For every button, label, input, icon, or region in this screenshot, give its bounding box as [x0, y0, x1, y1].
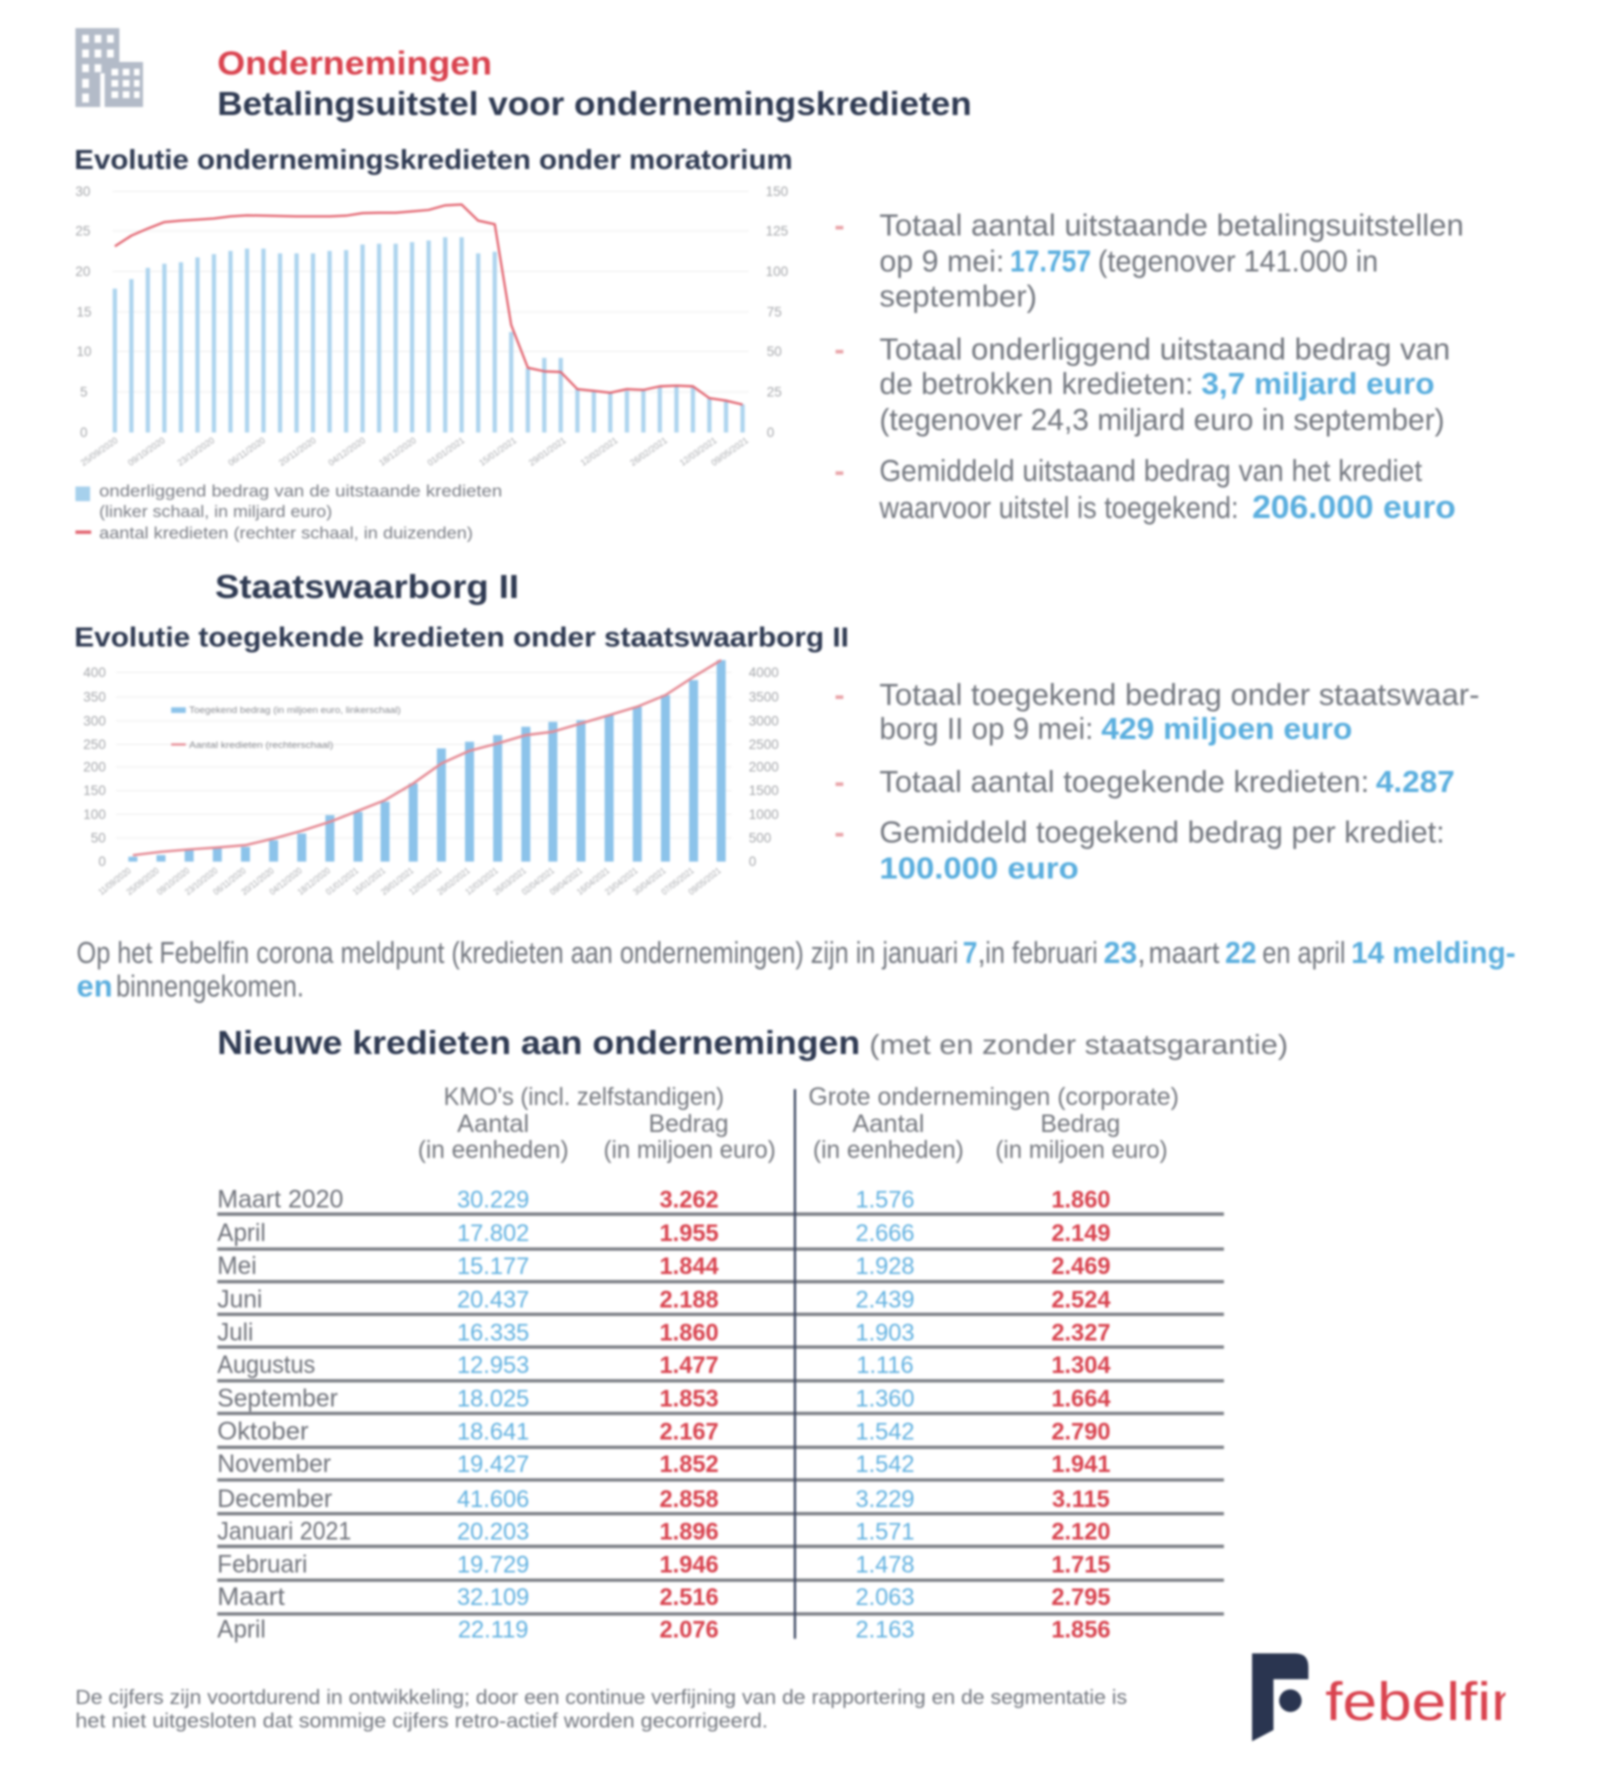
right axis labels: 0 [749, 854, 756, 869]
row: Mei: Mei [217, 1253, 257, 1280]
x axis date labels: 12/02/2021 [407, 866, 444, 897]
text block: Febelfin corona meldpunt: , [1137, 936, 1146, 970]
text block: Febelfin corona meldpunt: 14 melding- [1351, 936, 1516, 970]
row: September: 1.853 [660, 1387, 719, 1413]
row: Augustus [217, 1352, 1111, 1379]
bullet 1: Totaal toegekend bedrag onder staatswaar- [879, 678, 1480, 712]
row: Juli: 2.327 [1051, 1320, 1110, 1346]
right axis labels: 2500 [749, 737, 779, 752]
chart legend [171, 705, 401, 750]
right axis labels: 150 [766, 184, 788, 199]
x axis date labels: 23/04/2021 [603, 866, 639, 897]
row: April: 1.955 [660, 1221, 719, 1247]
bullet 1: 17.757 [1010, 244, 1091, 278]
row: November: 19.427 [457, 1452, 529, 1478]
bullet 2: Totaal onderliggend uitstaand bedrag van [879, 332, 1450, 366]
row: Juni: Juni [217, 1287, 262, 1314]
row: December [217, 1486, 1110, 1513]
row: November: 1.941 [1051, 1452, 1110, 1478]
x axis date labels: 20/11/2020 [239, 866, 276, 897]
x axis date labels: 26/02/2021 [628, 435, 669, 468]
row: Maart 2020 [217, 1186, 1110, 1213]
right axis labels: 0 [767, 425, 774, 440]
left axis labels: 50 [91, 830, 106, 845]
row: September: September [217, 1386, 338, 1413]
x axis date labels: 26/02/2021 [435, 866, 472, 897]
left axis labels: 100 [83, 807, 106, 822]
bullet 1: - [834, 208, 844, 242]
x axis date labels: 09/05/2021 [686, 866, 723, 897]
row: Maart 2020: 1.576 [855, 1187, 915, 1213]
row: April: 2.149 [1051, 1221, 1110, 1247]
x axis date labels: 26/03/2021 [492, 866, 528, 897]
line: number of credits [133, 660, 721, 855]
text block: Febelfin corona meldpunt: maart [1148, 936, 1220, 970]
row: Juni: 2.524 [1051, 1288, 1111, 1314]
right axis labels: 1500 [749, 783, 779, 798]
bars: granted amount [133, 660, 721, 862]
x axis date labels: 23/10/2020 [183, 866, 219, 897]
x axis date labels: 01/01/2021 [324, 866, 360, 897]
row: Augustus: 1.116 [856, 1353, 914, 1379]
row: Augustus: 1.477 [660, 1353, 719, 1379]
right axis labels: 3000 [749, 713, 779, 728]
subtitle: Betalingsuitstel voor ondernemingskredieten [217, 85, 972, 123]
row: Maart: 2.795 [1051, 1585, 1110, 1611]
row: Oktober: 2.790 [1051, 1419, 1110, 1445]
row: Mei: 2.469 [1051, 1254, 1110, 1280]
row: Mei: 1.844 [660, 1254, 720, 1280]
x axis date labels [79, 435, 750, 468]
row: Januari 2021: Januari 2021 [217, 1519, 351, 1546]
bullet 3 [834, 454, 1456, 525]
table heading [217, 1024, 1288, 1062]
column headers: (in eenheden) [418, 1137, 569, 1164]
bullet 1: Totaal aantal uitstaande betalingsuitstellen [879, 208, 1464, 242]
bullet 3: - [834, 815, 844, 849]
logo: febelfin [1252, 1653, 1600, 1746]
x axis date labels: 16/04/2021 [575, 866, 611, 897]
row: December: 3.115 [1052, 1487, 1110, 1513]
bullet 2: Totaal aantal toegekende kredieten: [879, 765, 1369, 799]
bullet 1: op 9 mei: [879, 244, 1004, 278]
legend: moratorium chart: onderliggend bedrag van de uitstaande kredieten [99, 482, 502, 501]
row: Januari 2021 [217, 1519, 1110, 1546]
column headers: Bedrag [1040, 1111, 1120, 1138]
row: Oktober: 18.641 [457, 1419, 529, 1445]
row: November: 1.542 [855, 1452, 915, 1478]
row: Juli: 1.860 [660, 1320, 719, 1346]
bars: outstanding amount [115, 237, 743, 432]
row: Maart 2020: 1.860 [1051, 1187, 1110, 1213]
x axis date labels: 25/09/2020 [79, 435, 120, 468]
column headers: Aantal [852, 1111, 924, 1138]
row: April: 2.666 [855, 1221, 915, 1247]
right axis labels: 3500 [749, 690, 779, 705]
x axis date labels: 18/12/2020 [377, 435, 418, 468]
x axis date labels: 01/01/2021 [426, 435, 466, 468]
row: April 2021: 2.163 [855, 1618, 915, 1644]
row: April 2021: 2.076 [660, 1618, 719, 1644]
x axis date labels: 12/02/2021 [579, 435, 619, 468]
row: Juli: 16.335 [457, 1320, 529, 1346]
x axis date labels: 18/12/2020 [296, 866, 332, 897]
x axis date labels: 09/10/2020 [126, 435, 167, 468]
text block: Febelfin corona meldpunt: en [77, 970, 113, 1004]
legend: moratorium chart [75, 482, 502, 542]
x axis date labels: 29/01/2021 [527, 435, 568, 468]
row: Januari 2021: 20.203 [457, 1520, 529, 1546]
row: Februari: Februari [217, 1551, 307, 1578]
column headers: KMO's (incl. zelfstandigen) [444, 1084, 724, 1111]
bullet 1: (tegenover 141.000 in [1098, 244, 1378, 278]
row: Maart: 2.063 [855, 1585, 915, 1611]
table heading: Nieuwe kredieten aan ondernemingen [217, 1024, 860, 1062]
x axis date labels: 30/04/2021 [631, 866, 668, 897]
row: Oktober: 2.167 [660, 1419, 719, 1445]
bullet 3: - [834, 454, 844, 488]
left axis labels: 5 [80, 384, 87, 399]
column headers: Bedrag [649, 1111, 729, 1138]
text block: Febelfin corona meldpunt: binnengekomen. [116, 970, 304, 1004]
text block: Febelfin corona meldpunt: in februari [985, 936, 1098, 970]
x axis date labels: 06/11/2020 [211, 866, 248, 897]
row: November [217, 1451, 1110, 1478]
x axis date labels: 15/01/2021 [477, 435, 518, 468]
x axis date labels: 12/03/2021 [463, 866, 500, 897]
row: Januari 2021: 1.571 [855, 1520, 915, 1546]
row: Juli: Juli [217, 1319, 253, 1346]
bullet 3: 100.000 euro [879, 851, 1079, 885]
row: Maart [217, 1584, 1110, 1611]
right axis labels [766, 184, 788, 440]
x axis date labels: 06/11/2020 [226, 435, 267, 468]
row: April 2021 [217, 1617, 1110, 1644]
x axis date labels: 11/09/2020 [96, 866, 133, 897]
footnote: het niet uitgesloten dat sommige cijfers retro-actief worden gecorrigeerd. [75, 1711, 768, 1733]
icon: office buildings [75, 28, 143, 107]
text block: Febelfin corona meldpunt [77, 936, 1516, 1004]
left axis labels: 350 [83, 690, 106, 705]
row: Maart: 32.109 [457, 1585, 529, 1611]
bullet 3 [834, 815, 1445, 885]
bullet 2: de betrokken kredieten: [879, 367, 1194, 401]
bullet 2 [834, 332, 1450, 437]
row: Juli [217, 1319, 1110, 1346]
footnote [75, 1687, 1127, 1733]
text block: Febelfin corona meldpunt: 7 [963, 936, 977, 970]
bullet 2: 4.287 [1376, 765, 1455, 799]
row: September: 1.360 [855, 1387, 915, 1413]
bullet 3: waarvoor uitstel is toegekend: [878, 491, 1239, 525]
left axis labels: 150 [83, 783, 106, 798]
x axis date labels: 07/05/2021 [659, 866, 696, 897]
row: November: November [217, 1451, 331, 1478]
footnote: De cijfers zijn voortdurend in ontwikkeling; door een continue verfijning van de rapportering en de segmentatie is [75, 1687, 1127, 1709]
right axis labels: 500 [749, 830, 771, 845]
row: December: 41.606 [457, 1487, 529, 1513]
title: Ondernemingen [217, 44, 492, 82]
x axis date labels: 20/11/2020 [277, 435, 318, 468]
legend: moratorium chart: aantal kredieten (rechter schaal, in duizenden) [99, 523, 473, 542]
row: September: 18.025 [457, 1387, 529, 1413]
text block: Febelfin corona meldpunt: Op het Febelfin corona meldpunt (kredieten aan ondernemingen) zijn in januari [77, 936, 958, 970]
text block: staatswaarborg key figures [834, 678, 1480, 885]
right axis labels [749, 665, 779, 869]
row: Februari: 1.478 [855, 1552, 915, 1578]
bullet 2: 3,7 miljard euro [1201, 367, 1434, 401]
chart legend: Aantal kredieten (rechterschaal) [189, 740, 333, 750]
row: Mei [217, 1253, 1110, 1280]
left axis labels: 10 [77, 344, 92, 359]
column headers [418, 1084, 1179, 1164]
legend: moratorium chart: (linker schaal, in miljard euro) [99, 502, 332, 521]
left axis labels: 15 [77, 304, 92, 319]
column headers: (in miljoen euro) [604, 1137, 776, 1164]
x axis date labels: 09/05/2021 [709, 435, 750, 468]
right axis labels: 1000 [749, 807, 779, 822]
row: Juni [217, 1287, 1111, 1314]
table: new credits [217, 1084, 1224, 1644]
left axis labels: 400 [83, 665, 106, 680]
row: April 2021: 22.119 [458, 1618, 528, 1644]
left axis labels: 30 [75, 184, 90, 199]
line: number of credits [115, 205, 743, 405]
row: Februari: 1.946 [660, 1552, 719, 1578]
chart legend: Toegekend bedrag (in miljoen euro, linkerschaal) [189, 705, 401, 715]
bullet 3: Gemiddeld uitstaand bedrag van het krediet [879, 454, 1423, 488]
bullet 2: - [834, 765, 844, 799]
row: Oktober [217, 1418, 1110, 1445]
row: Januari 2021: 1.896 [660, 1520, 719, 1546]
left axis labels: 300 [83, 713, 106, 728]
row: Februari: 19.729 [457, 1552, 529, 1578]
row: Januari 2021: 2.120 [1051, 1520, 1110, 1546]
left axis labels: 250 [83, 737, 106, 752]
x axis date labels: 02/04/2021 [520, 866, 556, 897]
text block: Febelfin corona meldpunt: 23 [1103, 936, 1137, 970]
x axis date labels: 25/09/2020 [125, 866, 161, 897]
bullet 1 [834, 208, 1464, 313]
left axis labels: 25 [75, 223, 90, 238]
row: September [217, 1386, 1111, 1413]
chart: staatswaarborg bars and line [83, 660, 779, 897]
row: Maart 2020: 30.229 [457, 1187, 529, 1213]
chart heading: moratorium: Evolutie ondernemingskredieten onder moratorium [74, 144, 793, 175]
row: April 2021: April [217, 1617, 266, 1644]
row: Juni: 20.437 [457, 1288, 529, 1314]
right axis labels: 125 [766, 223, 788, 238]
row: Februari [217, 1551, 1110, 1578]
right axis labels: 100 [766, 264, 788, 279]
row: April [217, 1220, 1110, 1247]
row: Mei: 15.177 [457, 1254, 529, 1280]
row: Oktober: 1.542 [855, 1419, 915, 1445]
row: Augustus: Augustus [217, 1352, 315, 1379]
left axis labels: 200 [83, 759, 106, 774]
bullet 1: september) [879, 279, 1037, 313]
x axis date labels: 04/12/2020 [268, 866, 304, 897]
bullet 2: (tegenover 24,3 miljard euro in september) [879, 403, 1445, 437]
row: Augustus: 1.304 [1051, 1353, 1111, 1379]
row: Maart 2020: Maart 2020 [217, 1186, 343, 1213]
text block: Febelfin corona meldpunt: , [977, 936, 986, 970]
column headers: Aantal [457, 1111, 529, 1138]
text block: moratorium key figures [834, 208, 1464, 525]
logo: febelfin: febelfin [1325, 1672, 1526, 1732]
row: Juli: 1.903 [855, 1320, 915, 1346]
x axis date labels: 09/04/2021 [548, 866, 584, 897]
x axis date labels: 29/01/2021 [379, 866, 415, 897]
row: September: 1.664 [1051, 1387, 1111, 1413]
bullet 1: - [834, 678, 844, 712]
bullet 2: - [834, 332, 844, 366]
right axis labels: 25 [767, 384, 782, 399]
row: December: 3.229 [855, 1487, 915, 1513]
row: April: April [217, 1220, 266, 1247]
row: April: 17.802 [457, 1221, 529, 1247]
section heading: Staatswaarborg II: Staatswaarborg II [215, 568, 519, 606]
column headers: Grote ondernemingen (corporate) [808, 1084, 1179, 1111]
right axis labels: 2000 [749, 759, 779, 774]
row: Maart: Maart [217, 1584, 285, 1611]
right axis labels: 50 [767, 344, 782, 359]
bullet 1: borg II op 9 mei: [879, 712, 1093, 746]
left axis labels [83, 665, 106, 869]
right axis labels: 4000 [749, 665, 779, 680]
row: April 2021: 1.856 [1051, 1618, 1110, 1644]
row: Oktober: Oktober [217, 1418, 309, 1445]
row: Mei: 1.928 [855, 1254, 915, 1280]
bullet 1: 429 miljoen euro [1101, 712, 1352, 746]
x axis date labels: 15/01/2021 [351, 866, 387, 897]
bullet 3: Gemiddeld toegekend bedrag per krediet: [879, 815, 1445, 849]
row: December: December [217, 1486, 332, 1513]
x axis date labels: 23/10/2020 [176, 435, 216, 468]
row: Februari: 1.715 [1051, 1552, 1110, 1578]
bullet 1 [834, 678, 1480, 746]
text block: Febelfin corona meldpunt: 22 [1225, 936, 1257, 970]
x axis date labels: 09/10/2020 [155, 866, 191, 897]
left axis labels [75, 184, 92, 440]
row: Juni: 2.439 [855, 1288, 915, 1314]
table heading: (met en zonder staatsgarantie) [869, 1029, 1288, 1060]
chart heading: staatswaarborg: Evolutie toegekende kredieten onder staatswaarborg II [74, 621, 849, 652]
chart: moratorium bars and line [75, 184, 788, 468]
left axis labels: 0 [80, 425, 87, 440]
column headers: (in eenheden) [813, 1137, 964, 1164]
row: November: 1.852 [660, 1452, 719, 1478]
x axis date labels: 04/12/2020 [326, 435, 367, 468]
x axis date labels: 12/03/2021 [678, 435, 719, 468]
row: Maart: 2.516 [660, 1585, 719, 1611]
left axis labels: 20 [75, 264, 90, 279]
row: Juni: 2.188 [660, 1288, 719, 1314]
bullet 3: 206.000 euro [1252, 488, 1456, 525]
x axis date labels [96, 866, 723, 897]
column headers: (in miljoen euro) [995, 1137, 1168, 1164]
text block: Febelfin corona meldpunt: en april [1262, 936, 1346, 970]
row: Augustus: 12.953 [457, 1353, 529, 1379]
row: December: 2.858 [660, 1487, 719, 1513]
right axis labels: 75 [767, 304, 782, 319]
row: Maart 2020: 3.262 [660, 1187, 719, 1213]
left axis labels: 0 [98, 854, 106, 869]
